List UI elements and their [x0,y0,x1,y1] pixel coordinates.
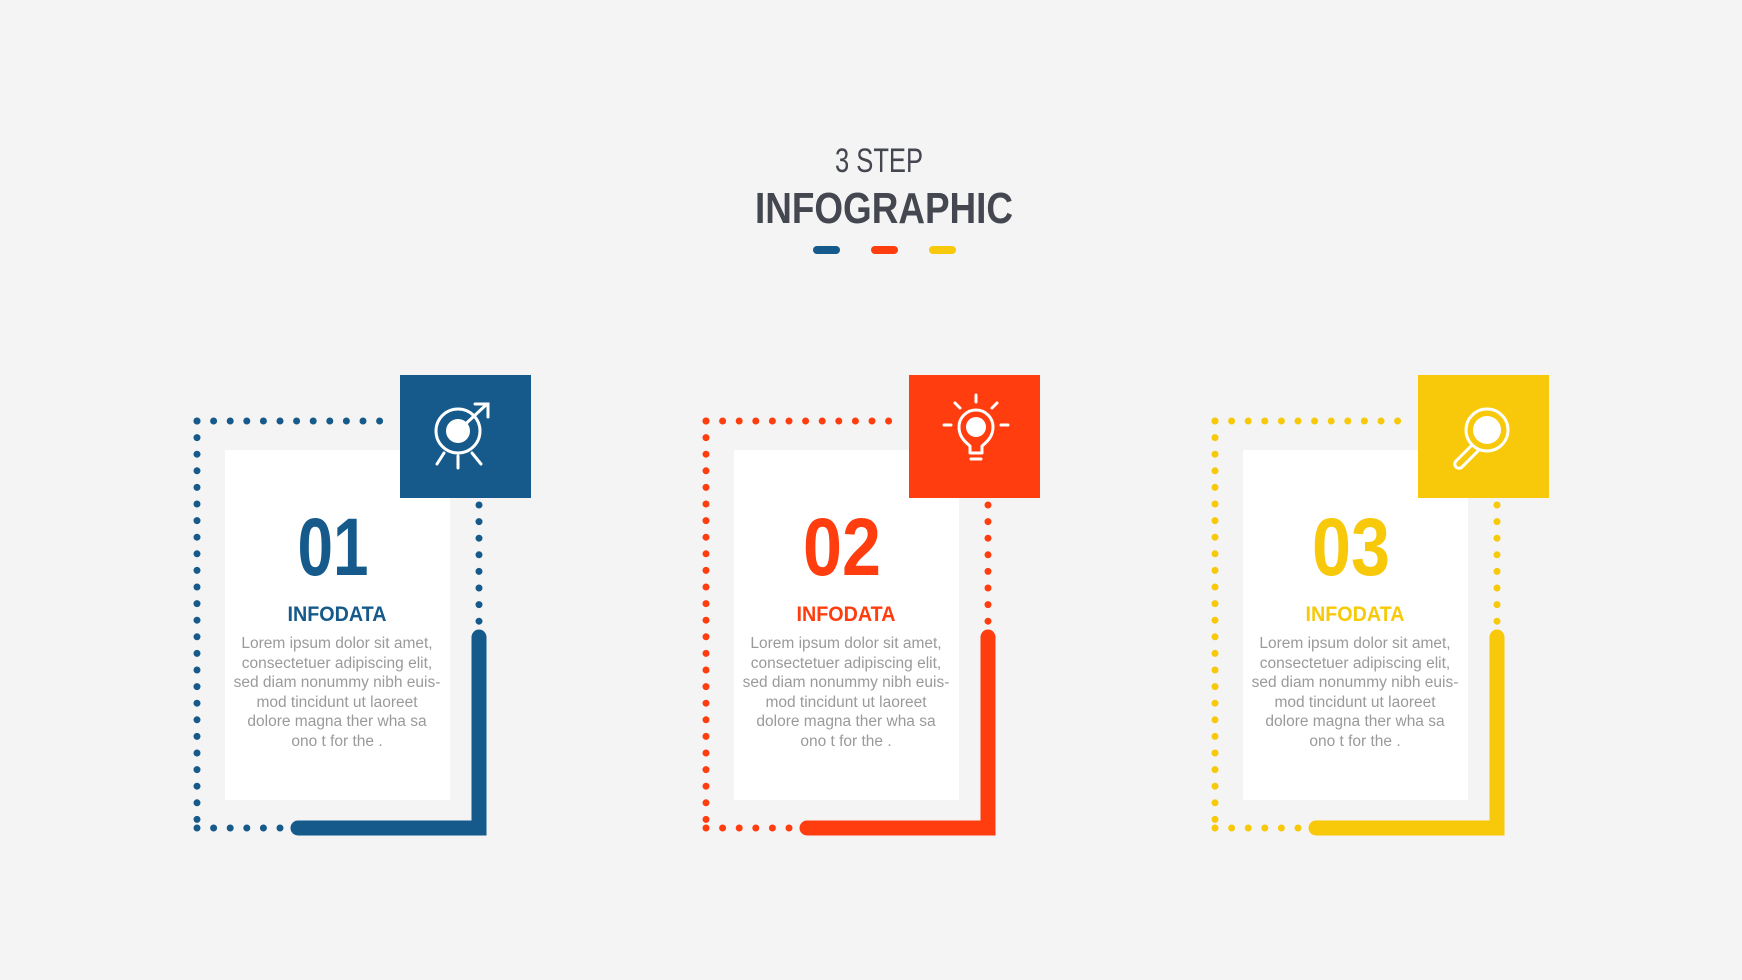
panel: step 2 [706,375,1040,828]
body text: Lorem ipsum dolor sit amet, [241,635,433,652]
card [225,450,450,800]
body text: dolore magna ther wha sa [247,713,427,730]
body text [234,635,440,750]
panel: step 3 [1215,375,1549,828]
icon box: magnifier [1418,375,1549,498]
card [734,450,959,800]
body text: dolore magna ther wha sa [1265,713,1445,730]
body text [743,635,949,750]
title [755,142,1013,254]
body text: sed diam nonummy nibh euis- [743,674,949,691]
body text: consectetuer adipiscing elit, [242,655,432,672]
body text: mod tincidunt ut laoreet [256,694,418,711]
number 02: 02 [803,502,881,593]
color dashes [813,246,956,254]
heading: INFOGRAPHIC: INFOGRAPHIC [755,184,1013,233]
card [1243,450,1468,800]
body text [1252,635,1458,750]
icon box: target [400,375,531,498]
body text: sed diam nonummy nibh euis- [1252,674,1458,691]
body text: consectetuer adipiscing elit, [1260,655,1450,672]
icon box: light bulb [909,375,1040,498]
subtitle: 3 STEP: 3 STEP [835,142,923,180]
label: INFODATA: INFODATA [1306,603,1404,626]
label: INFODATA: INFODATA [288,603,386,626]
body text: Lorem ipsum dolor sit amet, [750,635,942,652]
body text: mod tincidunt ut laoreet [765,694,927,711]
number 01: 01 [298,502,368,593]
body text: consectetuer adipiscing elit, [751,655,941,672]
label: INFODATA: INFODATA [796,603,896,626]
panel: step 1 [197,375,531,828]
body text: ono t for the . [291,733,383,750]
body text: ono t for the . [800,733,892,750]
body text: Lorem ipsum dolor sit amet, [1259,635,1451,652]
body text: mod tincidunt ut laoreet [1274,694,1436,711]
body text: ono t for the . [1309,733,1401,750]
body text: dolore magna ther wha sa [756,713,936,730]
number 03: 03 [1312,502,1390,593]
body text: sed diam nonummy nibh euis- [234,674,440,691]
